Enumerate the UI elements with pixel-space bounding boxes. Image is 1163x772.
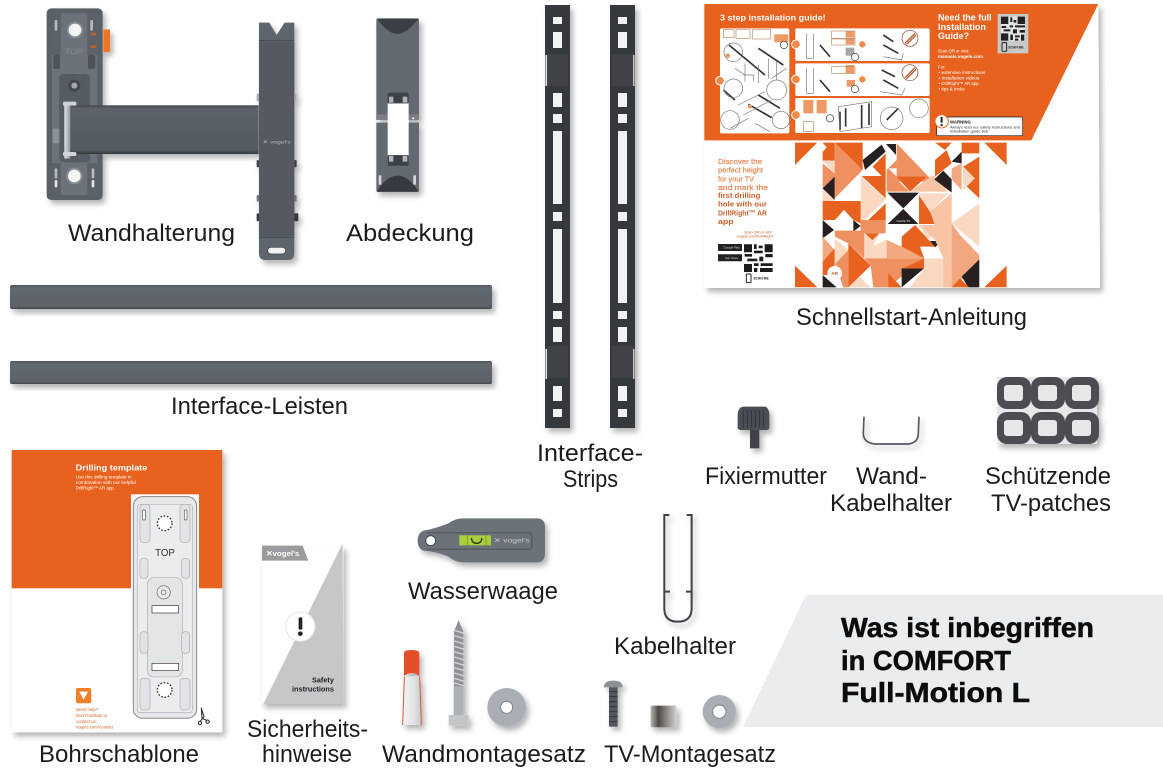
- QR code app: SCAN ME: [753, 276, 769, 280]
- text: safety instructions: [292, 675, 335, 693]
- title: Full-Motion L: [841, 677, 1030, 708]
- discover text: [718, 157, 768, 192]
- label: Interface-Leisten: Interface-Leisten: [171, 393, 348, 420]
- label: Wand-Kabelhalter: Wand-: [856, 463, 927, 490]
- label: Wandmontagesatz: Wandmontagesatz: [382, 741, 586, 768]
- panel: safety instructions: ✕vogel's: [266, 549, 299, 558]
- vogels tab: [262, 546, 308, 561]
- need the full guide text: Installation: [938, 22, 986, 32]
- discover bold text: DrillRight™ AR: [718, 208, 767, 217]
- title: in COMFORT: [841, 645, 1011, 676]
- need the full guide text: • tips & tricks: [939, 87, 965, 92]
- panel: safety instructions: [262, 543, 343, 704]
- label: Wand-Kabelhalter: Kabelhalter: [830, 490, 952, 517]
- label: Wasserwaage: Wasserwaage: [408, 578, 558, 605]
- need the full guide text: Scan QR or visit:: [938, 48, 969, 53]
- template outline: [131, 494, 199, 720]
- text: need help: Need help?: [76, 707, 99, 712]
- need the full guide text: [938, 13, 992, 92]
- icon: wall screw: [449, 620, 469, 726]
- label: Interface-Strips: [537, 440, 643, 493]
- discover text: perfect height: [718, 166, 764, 175]
- label: Sicherheitshinweise: Sicherheits-: [247, 716, 368, 743]
- need the full guide text: • DrillRight™ AR app: [939, 81, 979, 86]
- icon: exclamation: [286, 612, 315, 641]
- text: need help: [76, 707, 114, 730]
- label: Fixiermutter: Fixiermutter: [705, 463, 827, 490]
- warning box: installation guide first: [950, 130, 988, 134]
- discover bold text: app: [718, 217, 734, 226]
- label: Kabelhalter: Kabelhalter: [614, 633, 736, 660]
- icon: interface strip left: [545, 5, 570, 428]
- grey step items: [723, 30, 855, 132]
- discover text: Discover the: [718, 157, 762, 166]
- discover bold text: first drilling: [718, 191, 761, 200]
- text: template heading: DrillRight™ AR app.: [76, 486, 115, 491]
- text: safety instructions: Safety: [312, 675, 335, 684]
- step diagrams: [716, 28, 930, 133]
- label: Schützende TV-patches: TV-patches: [991, 490, 1111, 517]
- icon: interface strip right: [610, 5, 635, 428]
- grey diagonal: [263, 543, 343, 704]
- app store badges: Google Play: [724, 246, 740, 250]
- need the full guide text: manuals.vogels.com: [938, 54, 983, 59]
- geometric pattern: AR: [831, 271, 839, 276]
- badge: AR: [827, 266, 842, 281]
- need the full guide text: • installation videos: [939, 75, 979, 80]
- orange number badges: [716, 40, 866, 119]
- label: Interface-Strips: Strips: [563, 466, 618, 493]
- need the full guide text: • extensive instructions: [939, 70, 985, 75]
- need the full guide text: Guide?: [938, 31, 969, 41]
- label: Abdeckung: Abdeckung: [346, 220, 474, 247]
- icon: spacer: [651, 706, 677, 727]
- geometric pattern: [823, 143, 979, 287]
- discover bold text: [718, 191, 774, 239]
- QR code: [998, 14, 1028, 53]
- icon: TV washer: [703, 695, 736, 728]
- text: template heading: Use this drilling template in: [76, 474, 132, 479]
- sheet and orange band: [704, 4, 1100, 288]
- icon: wall cable clip: [863, 417, 919, 444]
- heading: 3 step: 3 step installation guide!: [720, 13, 826, 23]
- need the full guide text: For:: [938, 64, 945, 69]
- discover bold text: hole with our: [718, 200, 767, 209]
- label: Schützende TV-patches: Schützende: [985, 463, 1111, 490]
- text: template heading: [76, 463, 148, 491]
- panel: quick start guide: [704, 4, 1100, 288]
- icon: wall washer: [487, 688, 526, 727]
- orange step items: [725, 31, 855, 113]
- icon: wall plug: [403, 650, 421, 725]
- text: TOP: TOP: [155, 548, 175, 559]
- icon: interface bar 1: [10, 285, 492, 309]
- icon: spirit level: ✕ vogel's: [494, 538, 530, 545]
- discover text: and mark the: [718, 183, 768, 192]
- label: TV-Montagesatz: TV-Montagesatz: [604, 741, 776, 768]
- title: [841, 612, 1094, 708]
- label: Wandhalterung: Wandhalterung: [68, 220, 235, 247]
- need the full guide text: Need the full: [938, 13, 992, 23]
- text: TOP: TOP: [65, 46, 83, 56]
- app store badges: App Store: [725, 256, 739, 260]
- label: Interface-Strips: Interface-: [537, 440, 643, 467]
- label: Wand-Kabelhalter: [830, 463, 952, 517]
- label: Bohrschablone: Bohrschablone: [39, 741, 199, 768]
- icon: cover: [376, 18, 419, 192]
- panel: drilling template: [12, 450, 222, 732]
- text: safety instructions: instructions: [292, 684, 334, 693]
- app store badges: [718, 244, 742, 261]
- warning box: WARNING: [950, 119, 972, 124]
- logo on bracket: ✕ vogel's: [263, 139, 291, 145]
- icon: TV bolt: [604, 681, 623, 727]
- label: Schnellstart-Anleitung: Schnellstart-Anleitung: [796, 304, 1027, 331]
- icon: fixing nut: [738, 407, 769, 448]
- discover text: for your TV: [718, 174, 755, 183]
- text: template heading: Drilling template: [76, 463, 148, 472]
- warning box: [935, 115, 1023, 136]
- panel: title banner: [743, 595, 1163, 727]
- orange header: [12, 450, 222, 588]
- QR code: SCAN ME: [1008, 45, 1024, 49]
- icon: cable holder: [664, 515, 692, 622]
- warning marks: [780, 41, 859, 122]
- label: Sicherheitshinweise: [247, 716, 368, 768]
- QR code app: [744, 244, 773, 283]
- icon: vogels logo: [76, 688, 91, 703]
- text: need help: Don't hesitate to: [76, 713, 108, 718]
- icon: scissors: [198, 708, 209, 725]
- icon: interface bar 2: [10, 361, 492, 384]
- text: need help: contact us:: [76, 719, 97, 724]
- badge: center TV: Centre TV: [897, 219, 910, 223]
- icon: orange tab: [103, 29, 110, 52]
- corner triangles: [795, 143, 1007, 287]
- text: template heading: combination with our helpful: [76, 480, 136, 485]
- discover bold text: vogels.com/DrillRight: [737, 235, 774, 239]
- icon: protective TV patches: [997, 377, 1099, 444]
- text: need help: vogels.com/contact: [76, 725, 114, 730]
- title: Was ist inbegriffen: [841, 612, 1094, 643]
- warning box: Always read our safety instructions and: [950, 125, 1020, 129]
- discover bold text: Scan QR or visit:: [744, 230, 773, 234]
- label: Sicherheitshinweise: hinweise: [262, 741, 352, 768]
- icon: wall bracket: [47, 8, 298, 260]
- icon: spirit level: [418, 518, 545, 562]
- label: Schützende TV-patches: [985, 463, 1111, 517]
